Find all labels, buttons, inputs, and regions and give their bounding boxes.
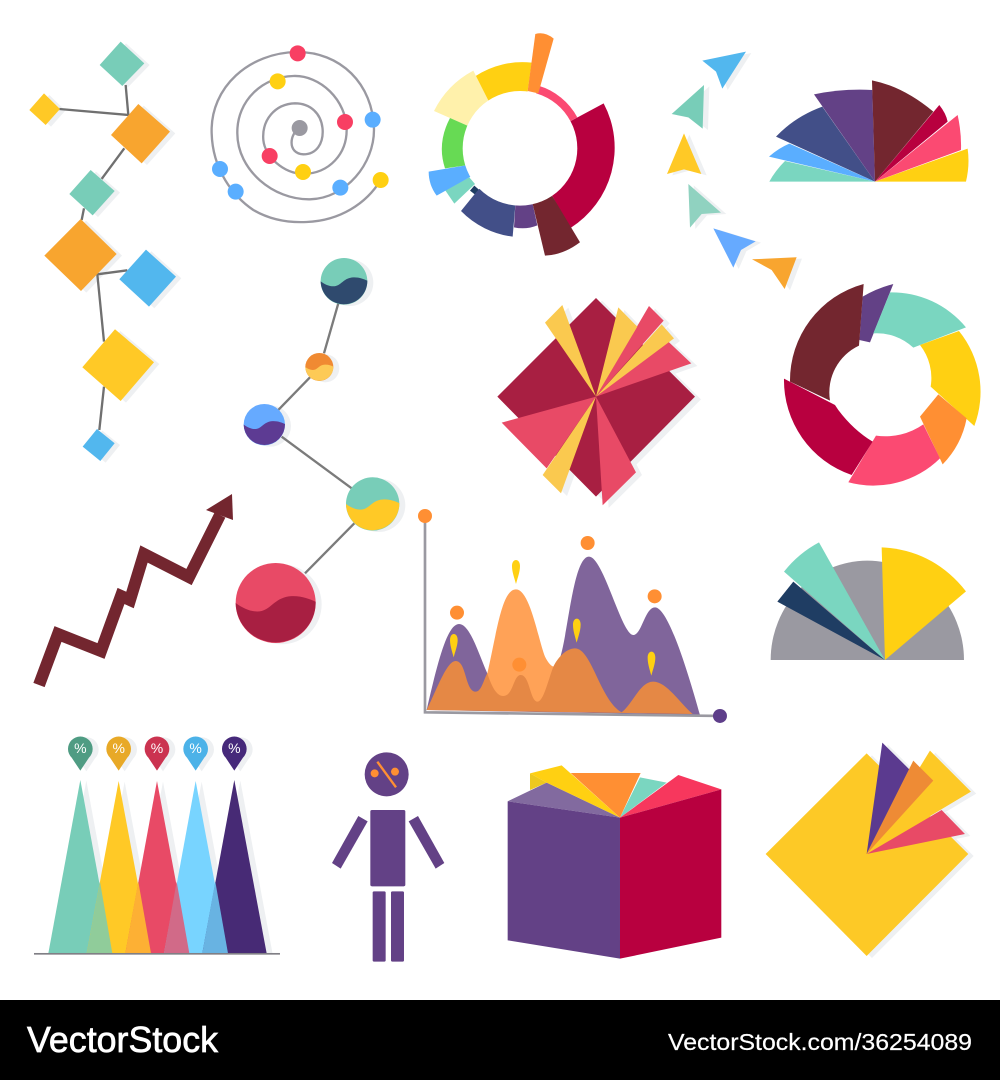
chart: percent spike bars: % (189, 740, 202, 756)
watermark bar (0, 1000, 1000, 1080)
chart: percent spike bars: % (74, 740, 87, 756)
chart: linked spheres (236, 258, 405, 644)
chart: gauge fan (771, 542, 966, 660)
chart: percent spike bars: % (228, 740, 241, 756)
chart: percent spike bars: % (112, 740, 125, 756)
chart: yellow diamond fan (766, 743, 976, 958)
arrow: rising zigzag (39, 494, 233, 685)
chart: spiral timeline (212, 45, 389, 222)
chart: percent spike bars: % (151, 740, 163, 756)
chart: open box (508, 765, 721, 959)
watermark bar: VectorStock (27, 1019, 219, 1060)
chart: sunburst ring (429, 33, 615, 256)
icons: arrowheads arc (667, 52, 802, 290)
chart: crimson pinwheel (497, 298, 701, 508)
icon: person with percent head (332, 752, 444, 962)
chart: area chart with peaks (418, 509, 727, 723)
watermark bar: VectorStock.com/36254089 (668, 1029, 972, 1055)
chart: half fan (769, 80, 968, 182)
chart: percent spike bars (34, 737, 280, 955)
chart: diamond network (29, 42, 181, 463)
chart: broken donut (784, 284, 981, 486)
